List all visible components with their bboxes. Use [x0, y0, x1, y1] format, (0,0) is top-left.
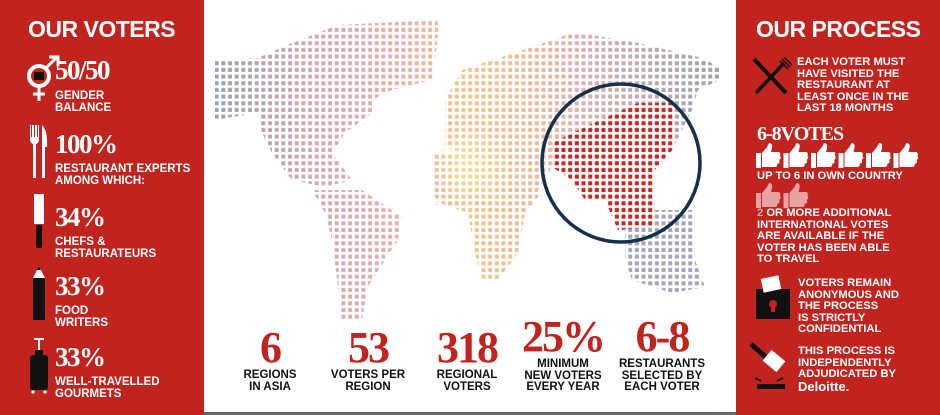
stat: restaurant experts	[55, 129, 190, 187]
stat: restaurants selected: RESTAURANTS	[619, 358, 705, 370]
text: international votes: VOTER HAS BEEN ABLE	[757, 242, 890, 254]
icon: ballot box	[756, 275, 790, 319]
text: deloitte: INDEPENDENTLY	[798, 357, 891, 369]
stat: regions	[243, 323, 297, 392]
stat: chefs: 34%	[55, 202, 104, 232]
stat: regions: REGIONS	[243, 369, 297, 381]
stat: voters per region: VOTERS PER	[331, 369, 405, 381]
stat: gourmets: GOURMETS	[55, 388, 121, 400]
stat: new voters: 25%	[522, 312, 604, 361]
icon: pink thumbs	[756, 183, 808, 208]
text: visit requirement: LAST 18 MONTHS	[797, 102, 893, 114]
text: anonymity: VOTERS REMAIN	[798, 277, 891, 289]
stat: food writers: 33%	[55, 271, 104, 301]
icon: thumbs up row	[756, 143, 918, 168]
icon: gavel	[749, 342, 786, 389]
stats row	[243, 312, 705, 393]
stat: voters per region: 53	[348, 323, 388, 372]
text: international votes: TO TRAVEL	[757, 253, 819, 265]
text: anonymity	[798, 277, 899, 335]
text: deloitte: ADJUDICATED BY	[798, 368, 896, 380]
stat: chefs: RESTAURATEURS	[55, 248, 156, 260]
stat: new voters: MINIMUM	[537, 358, 589, 370]
stat: new voters	[522, 312, 604, 393]
stat: gender balance: GENDER	[55, 90, 104, 102]
text: international votes: INTERNATIONAL VOTES	[757, 219, 888, 231]
stat: restaurant experts: AMONG WHICH:	[55, 175, 145, 187]
stat: regional voters: VOTERS	[443, 380, 491, 392]
stat: gender balance: 50/50	[55, 55, 109, 85]
stat: chefs: CHEFS &	[55, 236, 105, 248]
text: deloitte: Deloitte.	[798, 379, 849, 394]
text: anonymity: CONFIDENTIAL	[798, 323, 881, 335]
stat: voters per region	[331, 323, 405, 392]
text: anonymity: THE PROCESS	[798, 300, 878, 312]
stat: regional voters: 318	[437, 323, 497, 372]
stat: restaurant experts: RESTAURANT EXPERTS	[55, 163, 190, 175]
stat: food writers: WRITERS	[55, 317, 108, 329]
stat: restaurants selected: 6-8	[636, 312, 688, 361]
stat: voters per region: REGION	[345, 380, 391, 392]
heading: 6-8 votes: 6-8VOTES	[757, 123, 843, 145]
heading: our process: OUR PROCESS	[756, 16, 920, 42]
stat: restaurants selected: SELECTED BY	[622, 370, 702, 382]
stat: regions: IN ASIA	[249, 380, 291, 392]
text: deloitte: THIS PROCESS IS	[798, 345, 895, 357]
stat: regional voters	[437, 323, 498, 392]
stat: food writers: FOOD	[55, 305, 88, 317]
stat: new voters: NEW VOTERS	[524, 370, 602, 382]
circle highlight: asia	[540, 82, 702, 244]
text: visit requirement: EACH VOTER MUST	[797, 56, 905, 68]
stat: gender balance: BALANCE	[55, 102, 111, 114]
text: visit requirement	[797, 56, 909, 114]
icon: pencil	[33, 266, 45, 320]
stat: restaurants selected	[619, 312, 705, 393]
stat: gender balance	[55, 55, 111, 114]
icon: gender	[27, 56, 60, 101]
text: international votes	[757, 207, 892, 265]
text: visit requirement: LEAST ONCE IN THE	[797, 91, 909, 103]
icon: chef knife	[34, 194, 44, 248]
text: deloitte	[798, 345, 896, 394]
stat: food writers	[55, 271, 108, 329]
world map	[215, 21, 719, 319]
panel: our voters	[0, 0, 204, 415]
text: anonymity: IS STRICTLY	[798, 312, 865, 324]
text: international votes: 2 OR MORE ADDITIONAL	[757, 207, 891, 219]
stat: new voters: EVERY YEAR	[526, 381, 600, 393]
icon: suitcase	[30, 338, 48, 394]
heading: our voters: OUR VOTERS	[28, 16, 175, 42]
text: international votes: ARE AVAILABLE IF THE	[757, 230, 884, 242]
stat: regional voters: REGIONAL	[437, 369, 497, 381]
text: visit requirement: RESTAURANT AT	[797, 79, 890, 91]
stat: restaurants selected: EACH VOTER	[624, 381, 700, 393]
stat: gourmets: WELL-TRAVELLED	[55, 376, 160, 388]
stat: regions: 6	[260, 323, 280, 372]
icon: crossed cutlery	[752, 57, 792, 94]
stat: gourmets: 33%	[55, 342, 104, 372]
text: anonymity: ANONYMOUS AND	[798, 289, 899, 301]
text: own country: UP TO 6 IN OWN COUNTRY	[757, 170, 903, 182]
stat: chefs	[55, 202, 156, 260]
panel: our process	[736, 0, 940, 415]
icon: fork and knife	[30, 125, 48, 178]
stat: restaurant experts: 100%	[55, 129, 116, 159]
text: visit requirement: HAVE VISITED THE	[797, 68, 899, 80]
stat: gourmets	[55, 342, 160, 400]
